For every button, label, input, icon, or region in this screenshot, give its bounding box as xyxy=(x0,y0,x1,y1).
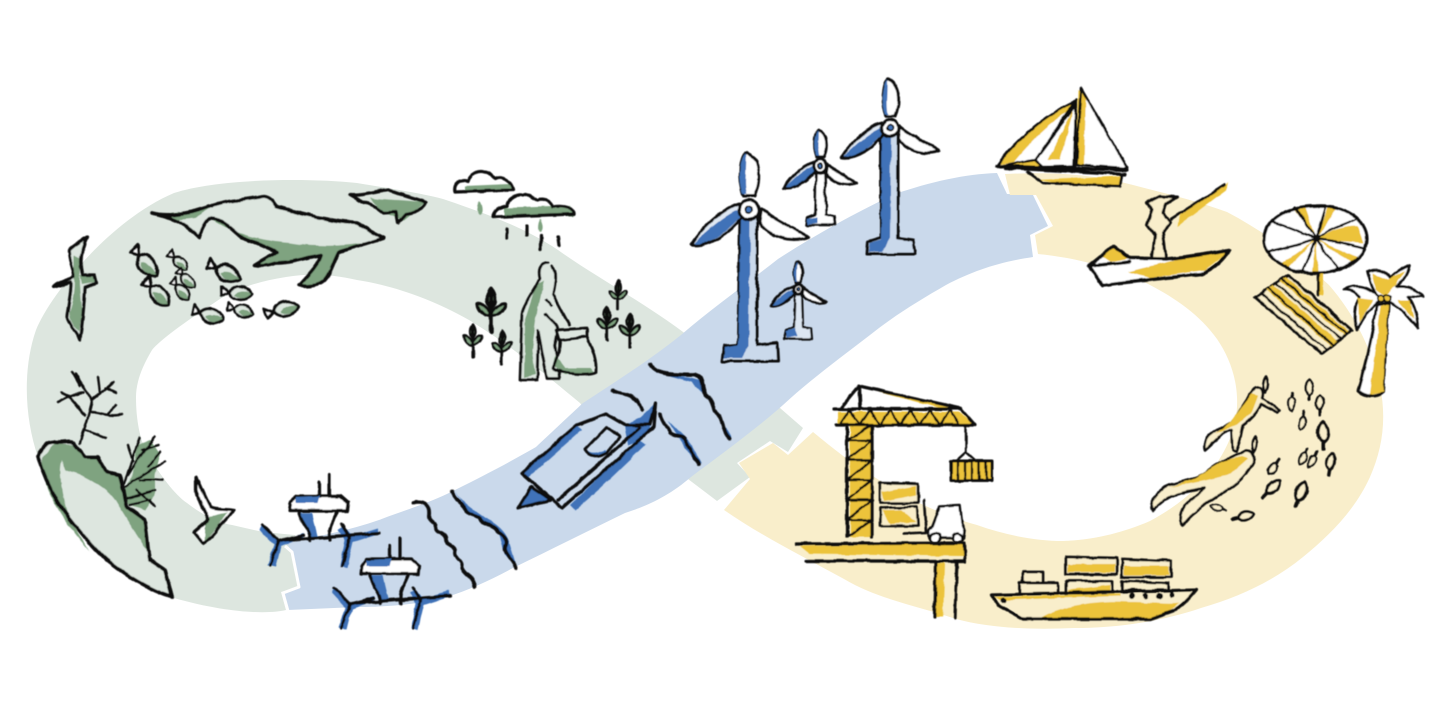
icon: wind turbine small xyxy=(784,130,857,225)
icon: offshore platform 1 xyxy=(260,475,379,567)
icon: school of fish xyxy=(127,243,300,326)
icon: wave 1 xyxy=(413,502,475,587)
icon: rain clouds xyxy=(455,171,574,249)
icon: wind turbine tall xyxy=(841,79,940,254)
icon: seabird left xyxy=(54,237,96,340)
icon: beach towel xyxy=(1255,275,1352,354)
icon: divers and fish xyxy=(1151,376,1337,525)
icon: coastal rock xyxy=(38,442,172,597)
icon: boatman xyxy=(1089,183,1229,285)
green band xyxy=(27,180,700,612)
icon: wave 5 xyxy=(650,364,732,439)
icon: wind turbine distant xyxy=(771,262,826,339)
yellow band xyxy=(724,173,1383,629)
icon: person collecting litter xyxy=(520,263,596,380)
panel: energy section (blue) xyxy=(260,79,1048,630)
green band crossing piece xyxy=(688,395,803,501)
icon: sailboat xyxy=(997,88,1127,186)
icon: wave 2 xyxy=(453,492,517,568)
icon: wave 3 xyxy=(612,390,642,410)
icon: small whale xyxy=(350,190,426,223)
icon: container ship xyxy=(992,557,1196,619)
icon: forklift xyxy=(904,500,965,543)
icon: pier xyxy=(796,543,965,617)
icon: beach umbrella xyxy=(1264,206,1367,295)
icon: survey vessel xyxy=(518,403,656,510)
icon: coastal plants xyxy=(463,281,640,364)
icon: seaweed on rock xyxy=(58,372,165,510)
icon: offshore platform 2 xyxy=(331,538,450,630)
panel: economy section (yellow) xyxy=(724,88,1423,629)
icon: palm tree xyxy=(1344,265,1423,396)
notch line between green and blue xyxy=(283,546,299,611)
blue band xyxy=(283,173,1048,610)
icon: wind turbine large xyxy=(691,152,808,361)
icon: port crane xyxy=(834,386,992,537)
icon: wave 4 xyxy=(660,414,702,464)
panel: environment section (green) xyxy=(27,171,803,612)
icon: large whale xyxy=(152,196,384,286)
icon: stacked containers xyxy=(880,483,918,526)
icon: seabird lower xyxy=(194,477,234,543)
